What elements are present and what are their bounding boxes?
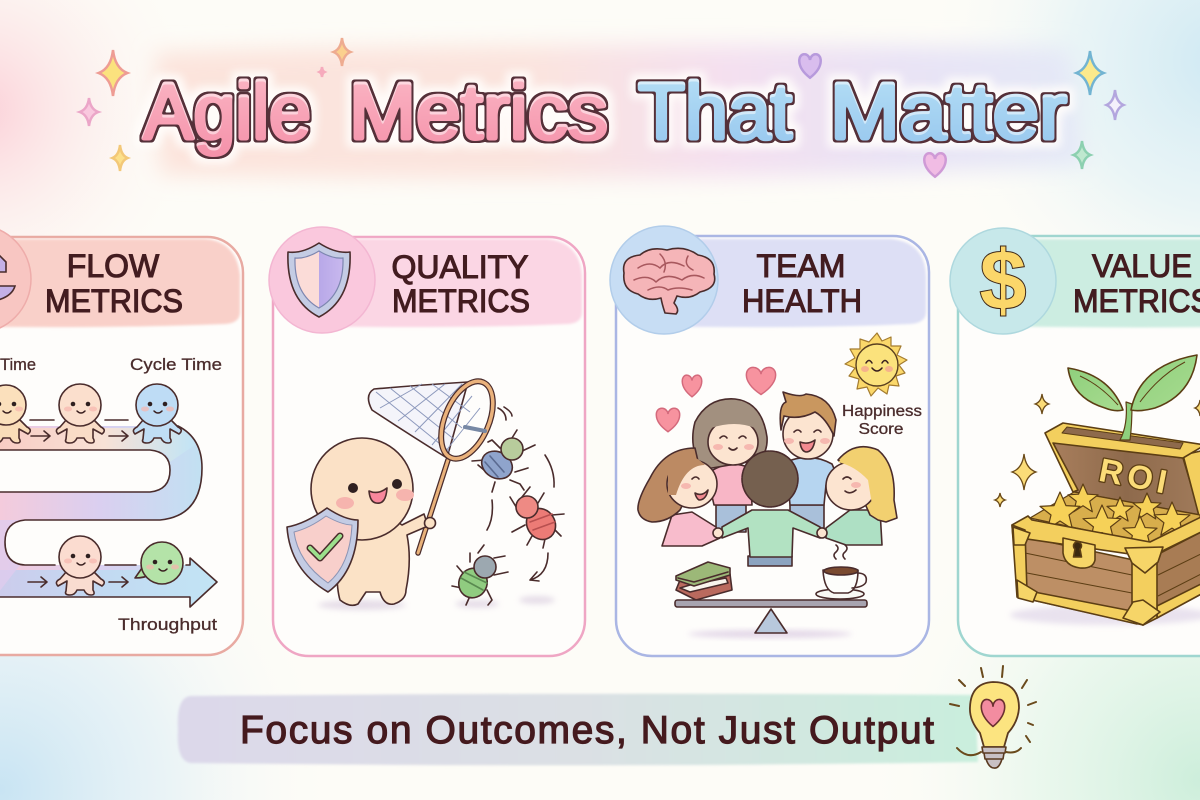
stars bbox=[1030, 484, 1200, 547]
icon: quality shield bbox=[269, 227, 375, 333]
chest shadow bbox=[1010, 605, 1200, 625]
icon: dollar circle: $ bbox=[980, 233, 1026, 327]
characters on the road bbox=[0, 384, 183, 595]
shadows bbox=[318, 596, 555, 610]
heading: quality metrics: QUALITY bbox=[392, 249, 528, 285]
footer band bbox=[178, 694, 978, 765]
header band: team bbox=[640, 239, 926, 327]
heading: flow metrics: FLOW bbox=[67, 248, 160, 284]
footer message: Focus on Outcomes, Not Just Output bbox=[240, 709, 934, 752]
label: happiness score: Happiness bbox=[842, 403, 922, 420]
coffee on seesaw bbox=[816, 545, 866, 599]
icon: brain bbox=[610, 226, 718, 334]
panel: team health bbox=[610, 226, 929, 656]
title: That bbox=[638, 66, 792, 156]
header band: value bbox=[985, 239, 1200, 328]
label: happiness score: Score bbox=[858, 421, 904, 438]
title: Agile bbox=[143, 66, 311, 156]
title band watercolor bbox=[155, 45, 1085, 179]
hearts bbox=[656, 367, 776, 432]
heading: team health: HEALTH bbox=[742, 283, 862, 319]
flow arrows bbox=[28, 431, 128, 587]
treasure chest bbox=[1012, 355, 1200, 625]
icon: smiling sun bbox=[845, 333, 907, 396]
bug: blue bbox=[472, 430, 535, 492]
sparkles bbox=[995, 394, 1200, 507]
icon: dollar circle bbox=[950, 228, 1056, 334]
bug: green bbox=[452, 545, 508, 605]
title: Matter bbox=[830, 66, 1067, 156]
icon: flow circle bbox=[0, 225, 31, 333]
lid bbox=[1053, 442, 1200, 515]
label: ROI: ROI bbox=[1096, 451, 1170, 500]
bug: red bbox=[510, 487, 564, 548]
seesaw bbox=[675, 600, 867, 638]
title: Metrics bbox=[349, 66, 608, 156]
net bbox=[368, 374, 503, 553]
panel: flow metrics bbox=[0, 225, 243, 655]
label: lead time: Time bbox=[0, 355, 36, 374]
label: throughput: Throughput bbox=[118, 615, 217, 634]
heading: flow metrics: METRICS bbox=[45, 283, 183, 319]
character with shield bbox=[287, 438, 436, 605]
heading: quality metrics bbox=[392, 249, 530, 319]
panel: quality metrics bbox=[269, 227, 585, 656]
label: happiness score bbox=[842, 403, 922, 438]
heading: team health bbox=[742, 248, 862, 319]
flow road with arrow bbox=[0, 420, 217, 607]
header band: flow bbox=[0, 239, 240, 327]
icon: lightbulb with heart bbox=[950, 666, 1036, 768]
box bbox=[1016, 535, 1143, 625]
heading: flow metrics bbox=[45, 248, 183, 319]
books on seesaw bbox=[676, 562, 732, 600]
motion lines bbox=[487, 407, 554, 581]
heading: value metrics bbox=[1073, 248, 1200, 319]
panel: value metrics bbox=[950, 228, 1200, 656]
sprout bbox=[1068, 355, 1197, 440]
label: cycle time: Cycle Time bbox=[130, 355, 222, 374]
title decorations: sparkles and hearts bbox=[80, 38, 1123, 177]
heading: value metrics: VALUE bbox=[1092, 248, 1192, 284]
title bbox=[143, 66, 1067, 156]
heading: quality metrics: METRICS bbox=[392, 283, 530, 319]
heading: team health: TEAM bbox=[757, 248, 845, 284]
header band: quality bbox=[300, 239, 582, 327]
team people in a circle bbox=[638, 392, 897, 566]
